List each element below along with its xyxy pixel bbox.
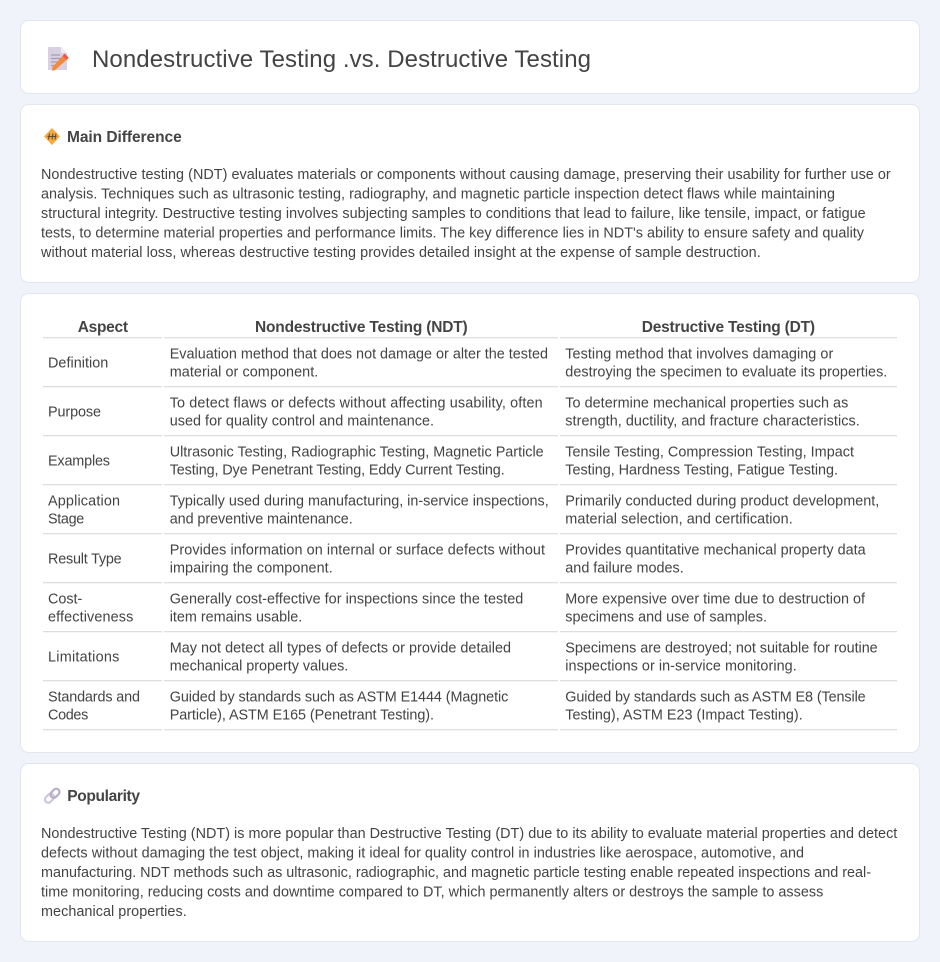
row: result type: Result Type: [48, 552, 122, 568]
row: definition: Definition: [48, 356, 108, 372]
row: examples: Tensile Testing, Compression Testing, Impact: [565, 444, 854, 460]
text block: popularity: mechanical properties.: [41, 904, 187, 920]
row: result type: impairing the component.: [170, 560, 333, 576]
row: result type: Provides information on internal or surface defects without: [170, 542, 545, 558]
row: result type: [43, 542, 897, 583]
row: limitations: Specimens are destroyed; not suitable for routine: [565, 640, 878, 656]
row: examples: Ultrasonic Testing, Radiographic Testing, Magnetic Particle: [170, 444, 544, 460]
text block: popularity: Nondestructive Testing (NDT) is more popular than Destructive Testing (DT) due to its ability to evaluate material properties and detect: [41, 826, 897, 842]
row: application stage: Typically used during manufacturing, in-service inspections,: [170, 494, 549, 510]
icon: document with pencil: [48, 47, 69, 70]
row: result type: Provides quantitative mechanical property data: [565, 542, 866, 558]
row: limitations: Limitations: [48, 650, 119, 666]
row: limitations: [43, 640, 897, 681]
row: standards and codes: Guided by standards such as ASTM E8 (Tensile: [565, 690, 866, 706]
row: examples: Testing, Hardness Testing, Fatigue Testing.: [565, 462, 838, 478]
row: examples: Examples: [48, 454, 110, 470]
table header row: Nondestructive Testing (NDT): [255, 319, 468, 336]
icon: chain link: [44, 787, 61, 804]
row: limitations: May not detect all types of defects or provide detailed: [170, 640, 511, 656]
row: application stage: material selection, and certification.: [565, 512, 793, 528]
text block: main difference: structural integrity. Destructive testing involves subjecting samples to conditions that lead to failure, like tensile, impact, or fatigue: [41, 206, 866, 222]
row: standards and codes: Guided by standards such as ASTM E1444 (Magnetic: [170, 690, 508, 706]
row: cost-effectiveness: More expensive over time due to destruction of: [565, 592, 866, 608]
row: standards and codes: Standards and: [48, 690, 140, 706]
text block: main difference: tests, to determine material properties and performance limits. The key difference lies in NDT's ability to ensure safety and quality: [41, 225, 865, 241]
row: definition: [43, 346, 897, 387]
row: purpose: used for quality control and maintenance.: [170, 414, 434, 430]
text block: popularity: [41, 826, 897, 920]
text block: main difference: without material loss, whereas destructive testing provides detailed insight at the expense of sample destruction.: [40, 245, 761, 261]
row: standards and codes: Testing), ASTM E23 (Impact Testing).: [565, 708, 803, 724]
row: cost-effectiveness: Cost-: [48, 592, 83, 608]
row: cost-effectiveness: effectiveness: [48, 610, 133, 626]
text block: popularity: defects without damaging the test object, making it ideal for quality control in industries like aerospace, automotive, and: [41, 845, 804, 861]
row: limitations: inspections or in-service monitoring.: [565, 658, 797, 674]
text block: popularity: time monitoring, reducing costs and downtime compared to DT, which permanently alters or destroys the sample to assess: [41, 884, 823, 900]
row: cost-effectiveness: Generally cost-effective for inspections since the tested: [170, 592, 523, 608]
row: limitations: mechanical property values.: [170, 658, 348, 674]
row: cost-effectiveness: item remains usable.: [170, 610, 302, 626]
panel: title header: [20, 20, 920, 94]
row: result type: and failure modes.: [565, 560, 684, 576]
text block: main difference: Nondestructive testing (NDT) evaluates materials or components without causing damage, preserving their usability for further use or: [41, 167, 891, 183]
row: application stage: Stage: [48, 512, 84, 528]
heading: main difference: Main Difference: [67, 129, 182, 146]
panel: popularity: [20, 764, 920, 942]
row: purpose: strength, ductility, and fracture characteristics.: [565, 414, 860, 430]
row: standards and codes: Particle), ASTM E165 (Penetrant Testing).: [170, 708, 434, 724]
heading: popularity: Popularity: [67, 788, 140, 805]
row: standards and codes: [43, 690, 897, 730]
row: application stage: Primarily conducted during product development,: [565, 494, 879, 510]
row: examples: Testing, Dye Penetrant Testing, Eddy Current Testing.: [170, 462, 505, 478]
row: application stage: and preventive maintenance.: [170, 512, 353, 528]
table header row: [43, 319, 897, 338]
panel: main difference: [20, 104, 920, 282]
text block: popularity: manufacturing. NDT methods such as ultrasonic, radiographic, and magnetic particle testing enable repeated inspections and real-: [41, 865, 871, 881]
row: definition: Testing method that involves damaging or: [565, 346, 834, 362]
row: cost-effectiveness: [43, 592, 897, 632]
text block: main difference: [40, 167, 891, 261]
row: application stage: Application: [48, 494, 120, 510]
row: definition: Evaluation method that does not damage or alter the tested: [170, 346, 548, 362]
row: examples: [43, 444, 897, 485]
icon: warning diamond: [44, 128, 60, 145]
table header row: Aspect: [78, 319, 128, 336]
row: purpose: Purpose: [48, 404, 101, 420]
panel: comparison table: [20, 294, 920, 752]
title: Nondestructive Testing .vs. Destructive Testing: [92, 46, 591, 73]
row: definition: material or component.: [170, 364, 318, 380]
text block: main difference: analysis. Techniques such as ultrasonic testing, radiography, and magnetic particle inspection detect flaws while maintaining: [41, 186, 835, 202]
row: standards and codes: Codes: [48, 708, 88, 724]
row: definition: destroying the specimen to evaluate its properties.: [565, 364, 887, 380]
row: purpose: To detect flaws or defects without affecting usability, often: [170, 396, 543, 412]
row: purpose: [43, 396, 897, 436]
row: purpose: To determine mechanical properties such as: [565, 396, 848, 412]
row: cost-effectiveness: specimens and use of samples.: [565, 610, 767, 626]
row: application stage: [43, 494, 897, 534]
table header row: Destructive Testing (DT): [642, 319, 815, 336]
